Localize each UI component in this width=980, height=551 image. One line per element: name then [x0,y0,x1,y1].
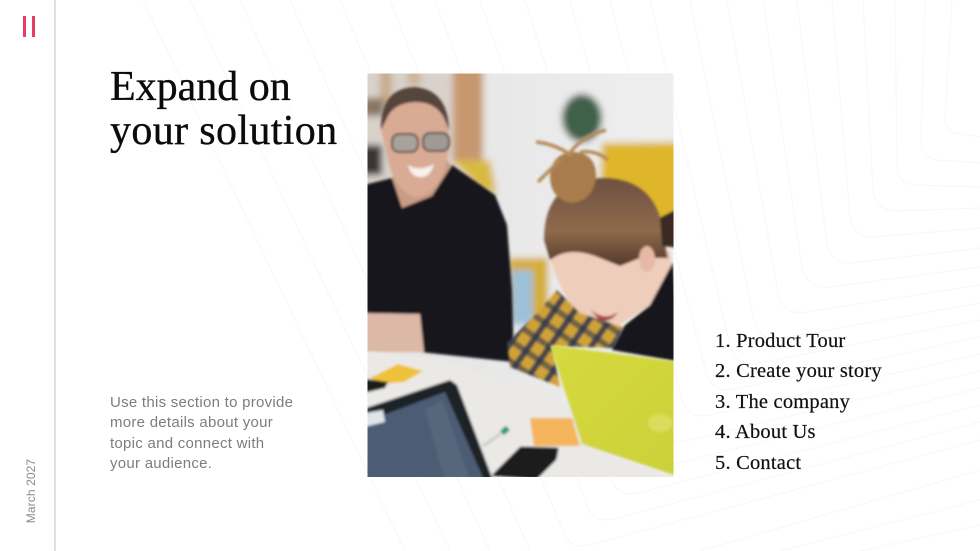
agenda list: 2. Create your story [715,360,882,382]
body text: your audience. [110,455,212,472]
body text: more details about your [110,414,273,431]
date label: March 2027 [24,459,38,523]
photo: two colleagues laughing at a table [368,74,674,477]
title: your solution [110,108,338,154]
sidebar divider [54,0,56,551]
agenda list: 4. About Us [715,421,816,443]
title [110,64,338,154]
body text: topic and connect with [110,435,264,452]
man in black sweater [360,87,514,362]
woman with hair bun [507,130,680,387]
agenda list: 5. Contact [715,452,801,474]
title: Expand on [110,64,291,110]
agenda list [715,330,882,474]
table with laptops, phone and notes [360,345,680,485]
body text [110,394,293,472]
agenda list: 3. The company [715,391,850,413]
photo background: wall and shelves [360,66,680,486]
agenda list: 1. Product Tour [715,330,845,352]
icon: red pause bars logo [23,16,35,37]
body text: Use this section to provide [110,394,293,411]
plaid shirt [507,290,623,387]
